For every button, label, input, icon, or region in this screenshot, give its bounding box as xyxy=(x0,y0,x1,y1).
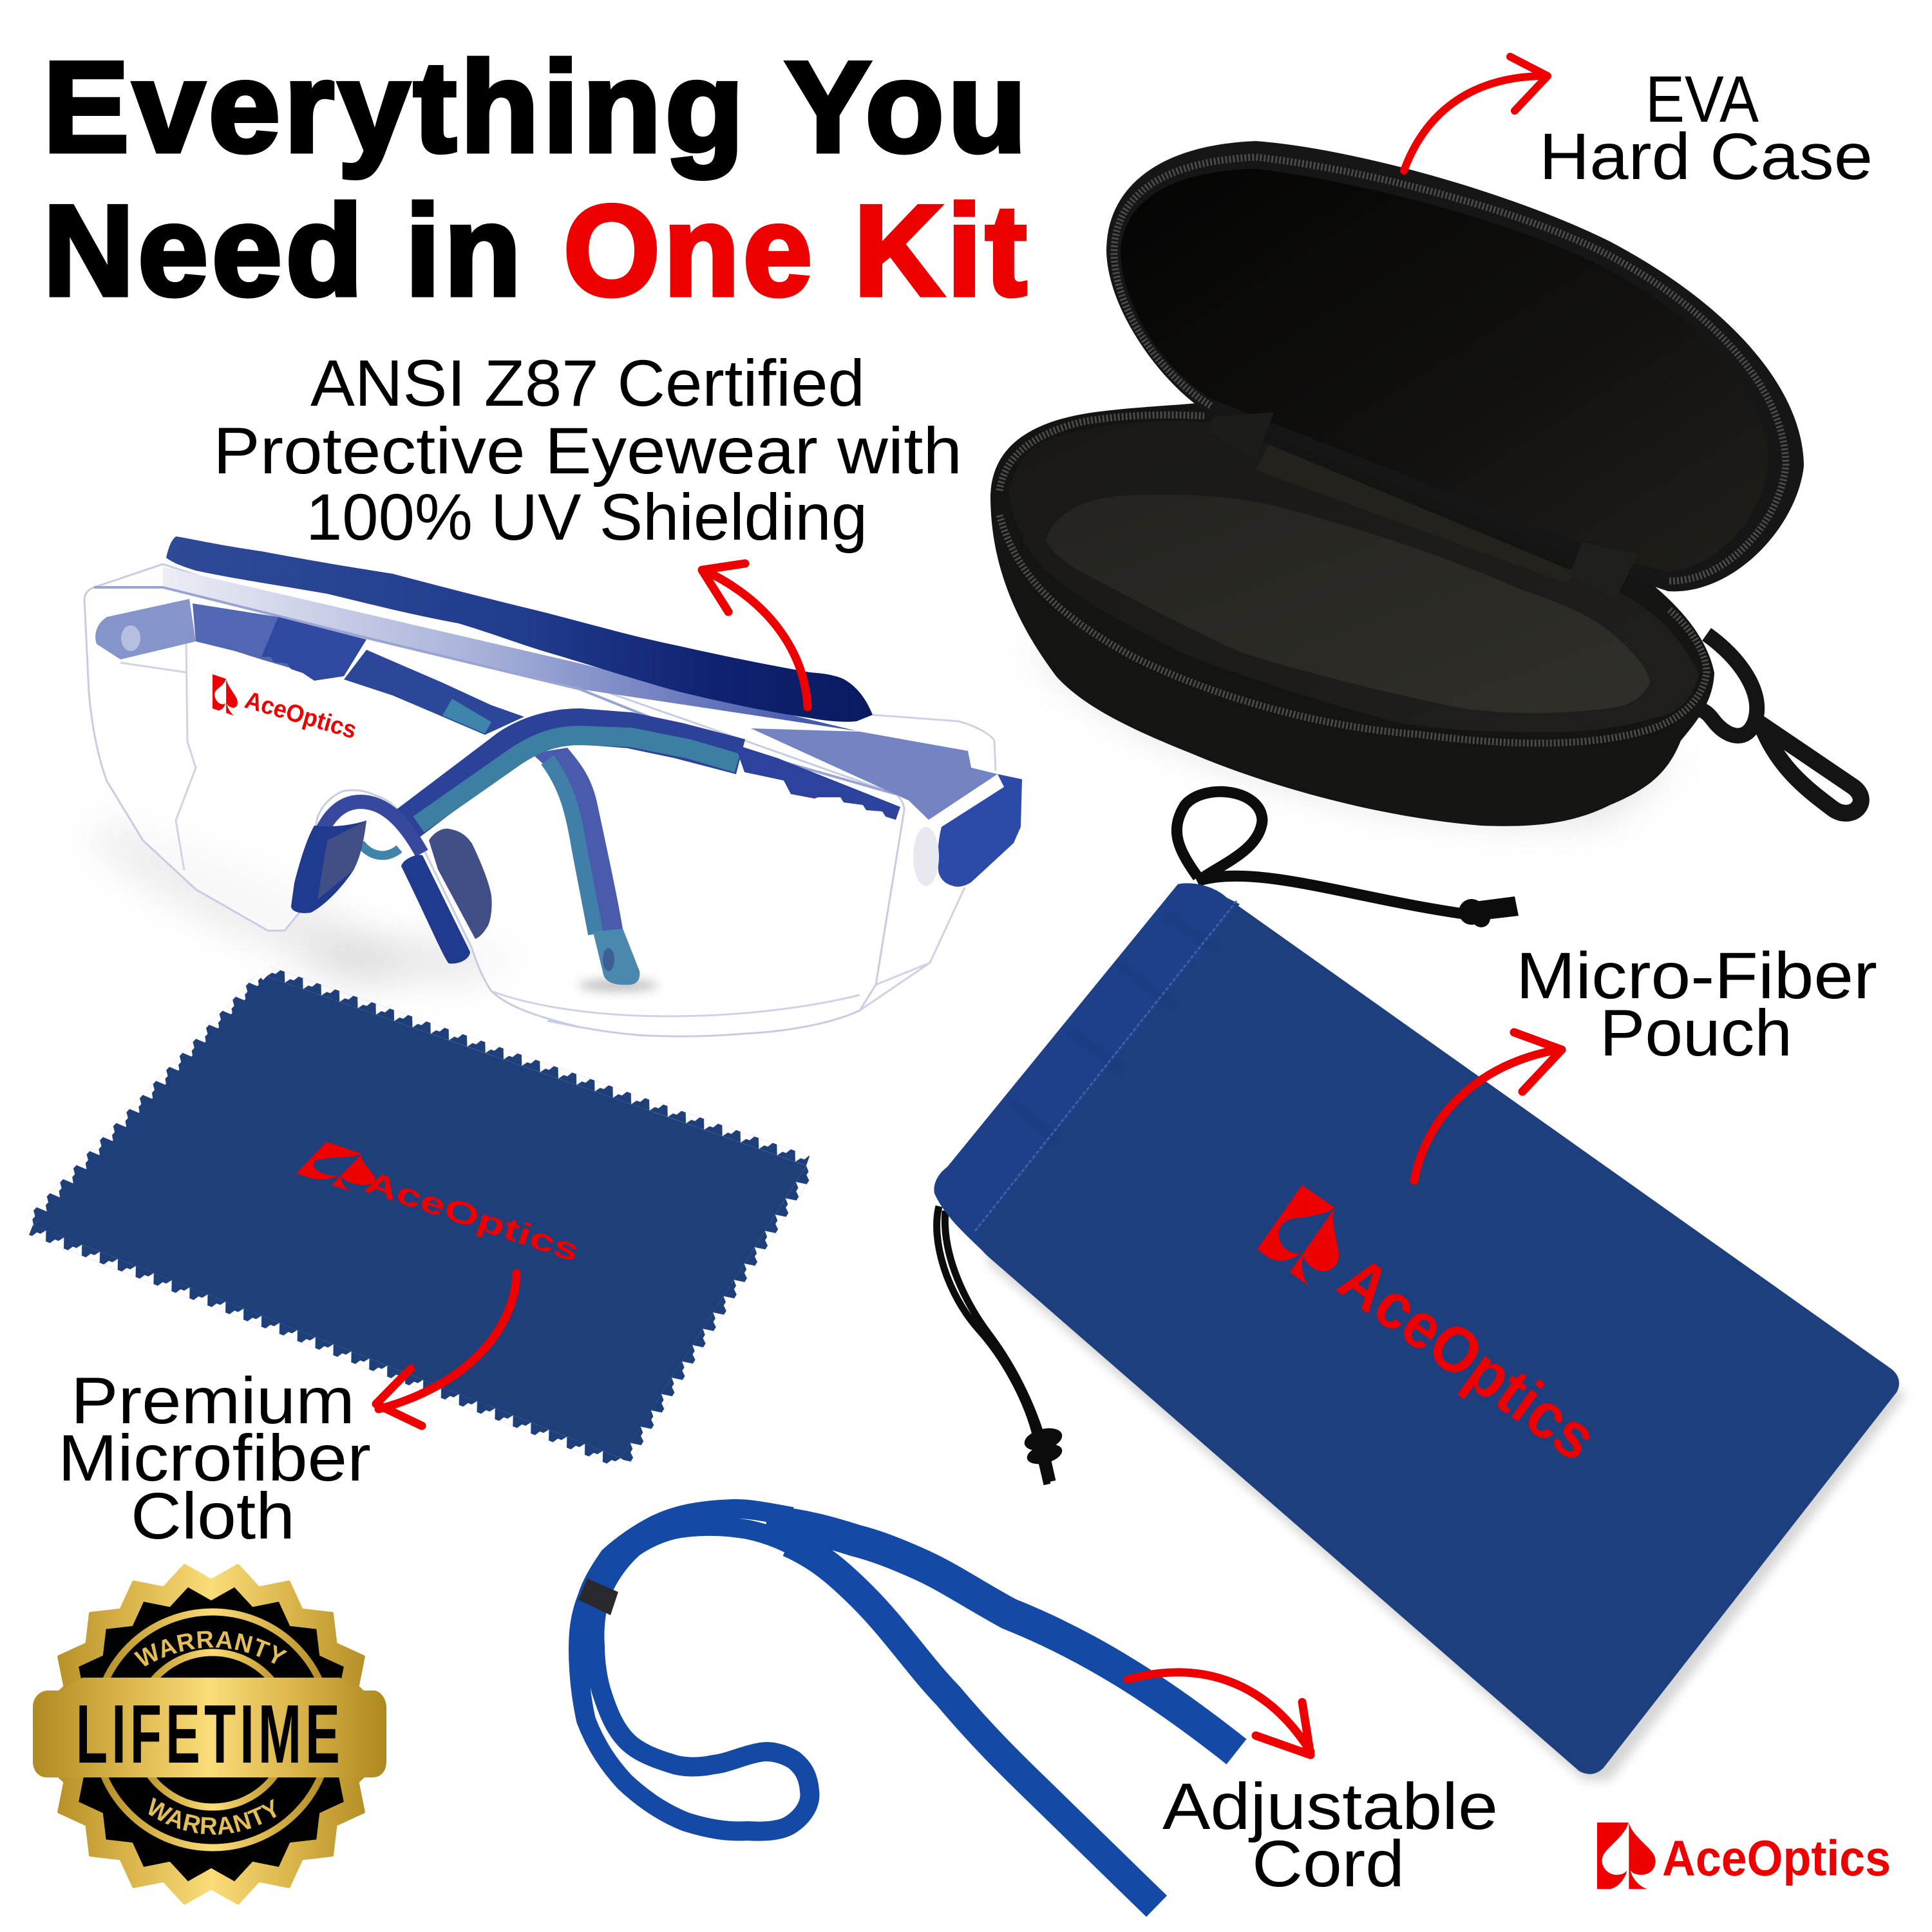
text: micro-fiber pouch label: Micro-Fiber xyxy=(1516,939,1877,1012)
eyewear: temple strip xyxy=(344,650,524,735)
logo mark xyxy=(1597,1823,1656,1889)
text: EVA hard case label xyxy=(1539,62,1873,193)
eyewear: teal bridge xyxy=(361,844,399,855)
text: EVA hard case label: EVA xyxy=(1645,62,1759,136)
case: base shell xyxy=(990,402,1714,826)
pouch logo text: AceOptics xyxy=(1326,1242,1609,1475)
icon: eyewear shadow xyxy=(79,802,658,1001)
pouch logo mark xyxy=(1257,1185,1362,1291)
text: adjustable cord label: Adjustable xyxy=(1162,1770,1498,1843)
eyewear logo text: AceOptics xyxy=(242,687,359,744)
eyewear: right nose pad front xyxy=(401,855,470,963)
text: adjustable cord label: Cord xyxy=(1252,1827,1405,1900)
badge: black seal xyxy=(64,1587,358,1881)
eyewear: right hinge xyxy=(938,774,1022,887)
arrow: cloth xyxy=(376,1273,516,1426)
eyewear: left nose pad face xyxy=(317,820,366,900)
case: base zipper xyxy=(999,415,1707,743)
badge: lifetime warranty xyxy=(33,1564,386,1905)
cord: slider xyxy=(578,1578,618,1615)
case: lid zipper xyxy=(1114,157,1786,581)
text: premium microfiber cloth label xyxy=(58,1364,371,1553)
eyewear: left temple block xyxy=(261,617,366,681)
eyewear: underside band xyxy=(163,567,857,731)
case: tray interior xyxy=(1009,421,1699,732)
title: Everything You xyxy=(43,35,1030,179)
case: soft shadow xyxy=(1030,644,1674,821)
cord xyxy=(578,1509,1236,1906)
badge: ribbon xyxy=(33,1678,386,1777)
eyewear: hinge clear pin xyxy=(913,827,939,886)
case: right hinge strap xyxy=(1569,542,1638,599)
eyewear: front arm xyxy=(402,726,741,828)
text: micro-fiber pouch label: Pouch xyxy=(1600,996,1792,1070)
cloth: pinked top edge xyxy=(267,967,810,1166)
badge: rings xyxy=(95,1612,330,1848)
eyewear: right nose pad back xyxy=(429,829,492,939)
hard case xyxy=(990,141,1861,826)
cloth logo text: AceOptics xyxy=(361,1165,583,1269)
badge: lifetime text: LIFETIME xyxy=(76,1688,344,1781)
case: tray floor xyxy=(1046,495,1650,713)
text: adjustable cord label xyxy=(1162,1770,1498,1900)
case: lid shell xyxy=(1106,141,1804,591)
badge: bottom warranty text: WARRANTY xyxy=(148,1797,277,1835)
text: premium microfiber cloth label: Microfiber xyxy=(58,1421,371,1495)
text: ANSI Z87 eyewear label: 100% UV Shielding xyxy=(306,480,867,554)
cloth: pinked bottom edge xyxy=(29,1226,621,1468)
pouch: left knot xyxy=(1022,1425,1065,1468)
case: lid interior xyxy=(1121,169,1768,572)
pouch: gather folds xyxy=(1011,914,1214,1140)
eyewear: left nose pad xyxy=(291,820,366,913)
cloth: body xyxy=(33,976,806,1458)
eyewear: left temple block light xyxy=(193,603,296,670)
text: premium microfiber cloth label: Cloth xyxy=(131,1479,295,1553)
text: ANSI Z87 eyewear label: Protective Eyewear with xyxy=(213,414,962,488)
eyewear: temple teal patch xyxy=(442,699,491,734)
eyewear: right temple block xyxy=(735,744,900,820)
cord: strand loop xyxy=(578,1509,810,1832)
pouch: left drawstring xyxy=(937,1206,1052,1484)
text: micro-fiber pouch label xyxy=(1516,939,1877,1070)
badge: warranty arcs xyxy=(132,1647,290,1674)
pouch: top knot xyxy=(1459,896,1519,927)
badge: gold seal xyxy=(43,1566,380,1903)
arrow: cord xyxy=(1128,1672,1311,1755)
case: clip ring xyxy=(1695,634,1757,735)
eyewear: clear lens xyxy=(84,564,904,1036)
arrow: pouch xyxy=(1414,1032,1562,1180)
eyewear: lens top edge xyxy=(94,587,896,794)
arrow: case xyxy=(1404,57,1548,171)
text: ANSI Z87 eyewear label xyxy=(213,346,962,554)
cord: lower tail xyxy=(789,1542,1157,1906)
eyewear: translucent upper right arm xyxy=(751,728,998,820)
case: clip hook xyxy=(1761,724,1861,813)
pouch: gathered top xyxy=(934,883,1240,1256)
pouch: stitch line xyxy=(974,901,1236,1233)
arrow: eyewear xyxy=(702,564,808,707)
badge: top warranty text: WARRANTY xyxy=(134,1631,287,1667)
pouch xyxy=(934,791,1906,1781)
logo text: AceOptics xyxy=(1662,1830,1891,1886)
cloth: pinked right edge xyxy=(621,1166,815,1464)
title: Need in xyxy=(43,179,525,323)
title: One Kit xyxy=(564,179,1030,323)
eyewear: inner lens line xyxy=(120,639,196,870)
eyewear: left hinge xyxy=(95,599,196,659)
cloth logo mark xyxy=(296,1142,392,1195)
eyewear: safety glasses xyxy=(84,536,1022,1036)
text: ANSI Z87 eyewear label: ANSI Z87 Certified xyxy=(310,346,865,420)
eyewear: clear top piece and back edge xyxy=(491,715,996,1016)
brand logo xyxy=(1597,1823,1891,1889)
pouch: shadow xyxy=(987,1224,1906,1781)
text: premium microfiber cloth label: Premium xyxy=(71,1364,355,1437)
eyewear: nose bridge arc xyxy=(322,802,422,853)
pouch: body xyxy=(934,883,1899,1774)
cloth: pinked left edge xyxy=(26,974,265,1226)
eyewear: down arm xyxy=(531,748,639,985)
cloth xyxy=(26,967,815,1468)
eyewear: left hinge hole xyxy=(121,625,140,651)
pouch: top drawstring xyxy=(1177,791,1468,914)
cord: inner strand xyxy=(600,1526,810,1597)
case: left hinge strap xyxy=(1209,412,1274,461)
text: EVA hard case label: Hard Case xyxy=(1539,120,1873,193)
title xyxy=(43,35,1030,323)
cord: upper strap xyxy=(766,1521,1236,1752)
case: tray wall band xyxy=(1256,444,1578,583)
eyewear logo mark xyxy=(213,674,238,717)
eyewear: brow bar xyxy=(166,536,873,722)
